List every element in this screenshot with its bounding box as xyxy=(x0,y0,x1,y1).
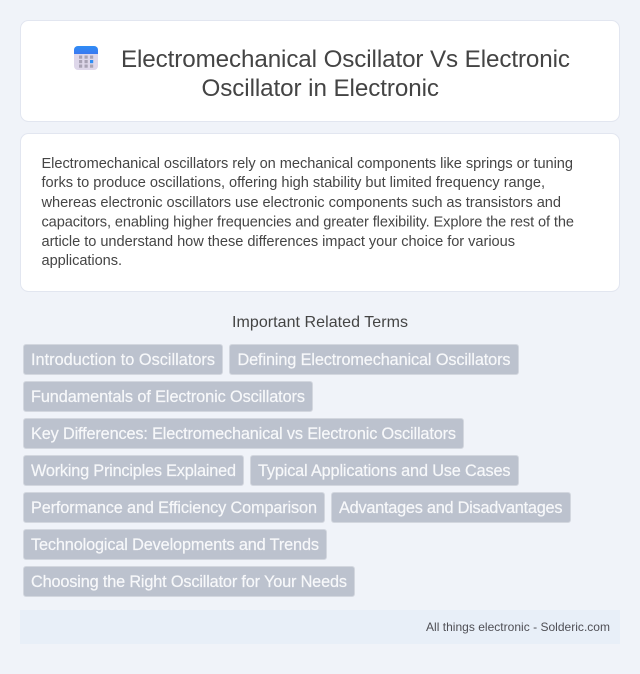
tag: developments: Technological Developments and Trends xyxy=(31,536,319,554)
tag: advantages xyxy=(332,492,570,522)
tag: applications: Typical Applications and Use Cases xyxy=(258,462,510,480)
tag: introduction xyxy=(24,344,222,374)
title xyxy=(121,46,570,102)
tag: defining: Defining Electromechanical Oscillators xyxy=(238,351,510,369)
icon: calendar grid xyxy=(74,46,98,70)
tag: working principles xyxy=(24,456,244,486)
panel: related terms tags xyxy=(24,344,570,596)
description text: applications. xyxy=(42,253,122,269)
tag: key differences xyxy=(24,418,464,448)
tag: advantages: Advantages and Disadvantages xyxy=(339,499,562,517)
title: Electromechanical Oscillator Vs Electronic xyxy=(121,46,570,73)
tag: fundamentals: Fundamentals of Electronic Oscillators xyxy=(31,388,305,406)
title: Oscillator in Electronic xyxy=(202,75,439,102)
tag: introduction: Introduction to Oscillators xyxy=(31,351,215,369)
tag: choosing xyxy=(24,566,354,596)
description text: forks to produce oscillations, offering high stability but limited frequency range, xyxy=(42,175,545,191)
description text xyxy=(40,156,574,269)
tag: developments xyxy=(24,530,326,560)
footer xyxy=(20,610,620,644)
description text: article to understand how these differences impact your choice for various xyxy=(42,234,515,250)
panel: description card xyxy=(20,134,620,292)
tag: applications xyxy=(250,456,518,486)
tag: fundamentals xyxy=(24,382,312,412)
tag: performance xyxy=(24,492,324,522)
description text: capacitors, enabling higher frequencies and greater flexibility. Explore the rest of the xyxy=(42,214,574,230)
tag: defining xyxy=(230,344,518,374)
tag: performance: Performance and Efficiency Comparison xyxy=(31,499,317,517)
heading: important related terms: Important Related Terms xyxy=(232,314,408,331)
footer: All things electronic - Solderic.com xyxy=(426,620,610,634)
description text: whereas electronic oscillators use electronic components such as transistors and xyxy=(40,195,561,211)
tag: working principles: Working Principles Explained xyxy=(31,462,236,480)
panel: title card xyxy=(20,20,620,122)
tag: key differences: Key Differences: Electromechanical vs Electronic Oscillators xyxy=(31,425,456,443)
tag: choosing: Choosing the Right Oscillator for Your Needs xyxy=(31,573,347,591)
description text: Electromechanical oscillators rely on mechanical components like springs or tuning xyxy=(42,156,573,172)
